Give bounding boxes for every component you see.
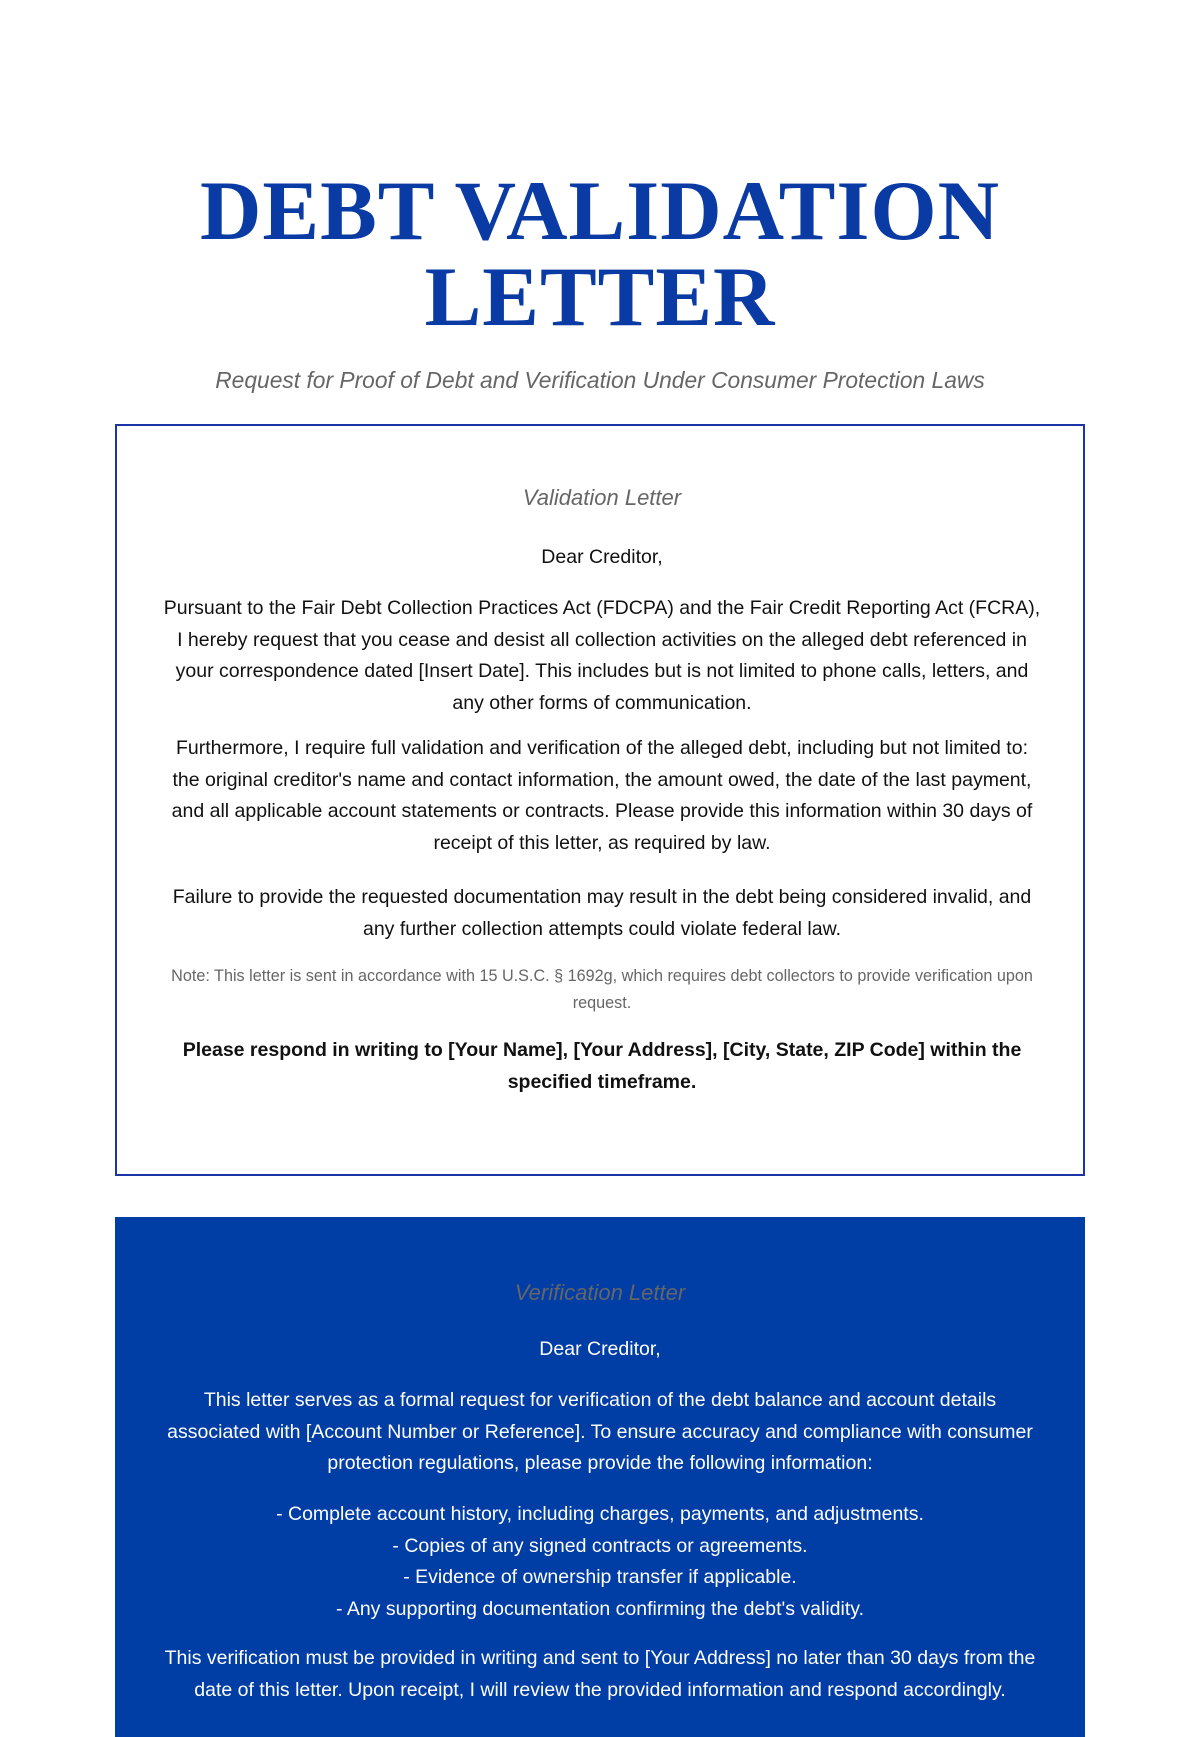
salutation: Dear Creditor, — [541, 546, 663, 568]
title: LETTER — [425, 250, 775, 344]
paragraph: cease and desist: Pursuant to the Fair Debt Collection Practices Act (FDCPA) and the Fair Credit Reporting Act (FCRA), I hereby request that you cease and desist all collection activities on the alleged debt referenced in your correspondence dated [Insert Date]. This includes but is not limited to phone calls, letters, and any other forms of communication. — [164, 597, 1040, 714]
list of required items: - Copies of any signed contracts or agreements. — [392, 1534, 808, 1556]
list of required items: - Evidence of ownership transfer if applicable. — [403, 1566, 797, 1588]
paragraph: request: This letter serves as a formal request for verification of the debt balance and account details associated with [Account Number or Reference]. To ensure accuracy and compliance with consumer protection regulations, please provide the following information: — [167, 1389, 1033, 1474]
paragraph: deadline: This verification must be provided in writing and sent to [Your Address] no later than 30 days from the date of this letter. Upon receipt, I will review the provided information and respond accordingly. — [165, 1647, 1035, 1700]
list of required items — [276, 1503, 924, 1620]
title — [200, 164, 1000, 344]
paragraph: validation requirements: Furthermore, I require full validation and verification of the alleged debt, including but not limited to: the original creditor's name and contact information, the amount owed, the date of the last payment, and all applicable account statements or contracts. Please provide this information within 30 days of receipt of this letter, as required by law. — [172, 737, 1032, 854]
subtitle: Request for Proof of Debt and Verification Under Consumer Protection Laws — [215, 367, 985, 393]
heading: validation letter: Validation Letter — [523, 485, 681, 510]
salutation: Dear Creditor, — [539, 1338, 661, 1360]
list of required items: - Complete account history, including charges, payments, and adjustments. — [276, 1503, 924, 1525]
paragraph: failure warning: Failure to provide the requested documentation may result in the debt being considered invalid, and any further collection attempts could violate federal law. — [173, 886, 1031, 940]
title: DEBT VALIDATION — [200, 164, 1000, 258]
panel: verification letter — [115, 1217, 1085, 1737]
note: Note: This letter is sent in accordance with 15 U.S.C. § 1692g, which requires debt collectors to provide verification upon request. — [171, 967, 1033, 1012]
heading: verification letter: Verification Letter — [515, 1280, 685, 1305]
list of required items: - Any supporting documentation confirming the debt's validity. — [336, 1598, 864, 1620]
panel: validation letter — [115, 424, 1085, 1176]
bold response instruction: Please respond in writing to [Your Name], [Your Address], [City, State, ZIP Code] within the specified timeframe. — [183, 1039, 1021, 1092]
